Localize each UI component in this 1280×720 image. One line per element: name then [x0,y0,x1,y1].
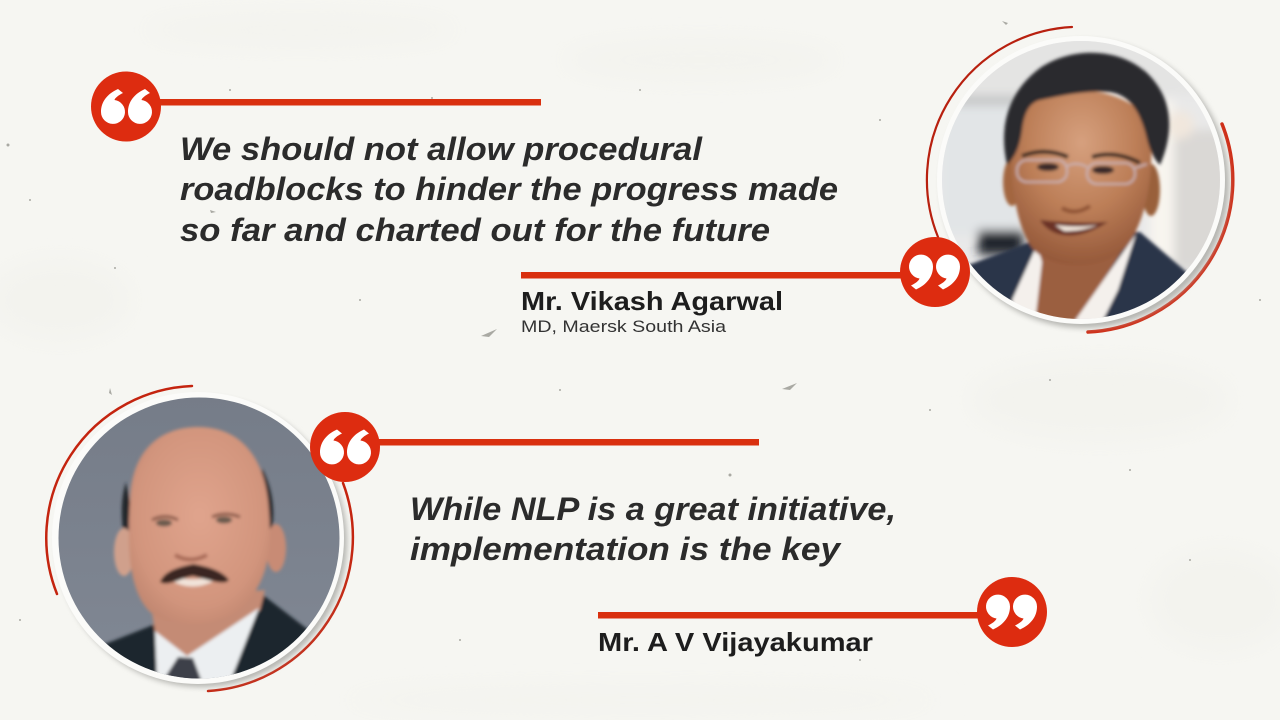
ears [114,528,134,576]
rule above quote 1 [160,99,541,106]
ears [1003,158,1021,206]
brows [1022,152,1068,157]
red arcs [927,27,1233,332]
neck [150,590,265,658]
shirt left collar [1012,245,1042,322]
portrait: Vikash Agarwal [927,27,1234,340]
eyes [156,520,172,526]
mouth [172,578,214,584]
face [1011,90,1151,265]
quote text 1: We should not allow procedural [180,131,703,167]
quote block 2 [310,412,1047,657]
head [129,427,270,624]
shirt [155,608,259,682]
hair [1004,53,1169,165]
speaker name 1: Mr. Vikash Agarwal [521,286,783,316]
eyes [1037,163,1059,171]
shirt right collar [1074,234,1136,322]
quote text 1: so far and charted out for the future [180,212,770,248]
icon: closing quote mark 1 [900,237,970,307]
mouth [1040,220,1108,236]
quote text 2 [410,491,896,567]
icon: opening quote mark 1 [91,72,161,142]
speaker role 1: MD, Maersk South Asia [521,317,727,336]
suit [969,230,1188,318]
quote text 2: implementation is the key [410,531,842,567]
rule above quote 2 [379,439,759,446]
brows [152,516,178,520]
portrait: A V Vijayakumar [46,386,353,691]
neck [1035,252,1122,319]
glasses [1017,160,1147,184]
icon: closing quote mark 2 [977,577,1047,647]
speaker name 2: Mr. A V Vijayakumar [598,627,873,657]
quote text 1: roadblocks to hinder the progress made [180,171,838,207]
suit [104,595,308,674]
red arcs [46,386,353,691]
tie [162,657,202,682]
quote block 1 [91,72,906,336]
hair sides [120,482,132,531]
quote text 1 [180,131,838,248]
icon: opening quote mark 2 [310,412,380,482]
nose shadow [175,555,207,560]
moustache [160,564,229,583]
nose shadow [1062,206,1090,212]
quote text 2: While NLP is a great initiative, [410,491,896,527]
rule below quote 1 [521,272,906,278]
rule below quote 2 [598,612,982,618]
